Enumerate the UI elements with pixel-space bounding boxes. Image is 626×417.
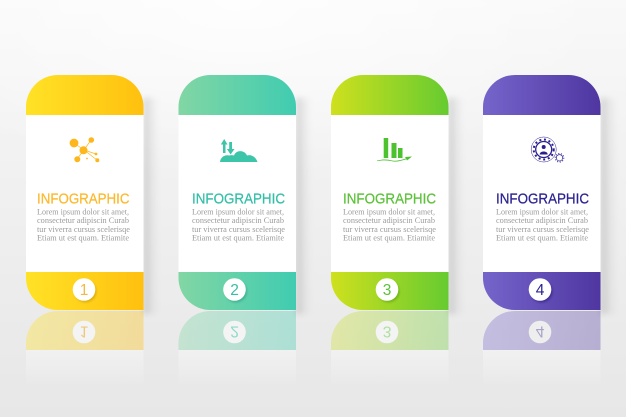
heading: INFOGRAPHIC bbox=[192, 191, 285, 207]
footer band bbox=[178, 272, 296, 310]
footer band bbox=[483, 272, 600, 310]
card shadow bbox=[448, 98, 464, 314]
card body bbox=[483, 115, 600, 272]
number badge: 2 bbox=[230, 282, 239, 299]
reflection bbox=[331, 311, 448, 386]
body text: Etiam ut est quam. Etiamite bbox=[343, 233, 435, 243]
icon: molecule network bbox=[70, 137, 99, 162]
body text: Lorem ipsum dolor sit amet, bbox=[192, 206, 284, 216]
footer band bbox=[331, 272, 448, 310]
body text: tur viverra cursus scelerisqe bbox=[343, 224, 436, 234]
body text: Etiam ut est quam. Etiamite bbox=[496, 233, 588, 243]
body text: Lorem ipsum dolor sit amet, bbox=[496, 206, 588, 216]
panel: step 1 bbox=[26, 75, 158, 386]
body text: tur viverra cursus scelerisqe bbox=[37, 224, 130, 234]
number badge: 3 bbox=[383, 282, 391, 299]
body text bbox=[192, 206, 285, 243]
body text: consectetur adipiscin Curab bbox=[192, 215, 284, 225]
body text: Etiam ut est quam. Etiamite bbox=[37, 233, 129, 243]
body text: consectetur adipiscin Curab bbox=[343, 215, 435, 225]
number badge bbox=[529, 278, 552, 302]
body text bbox=[343, 206, 436, 243]
number badge bbox=[376, 278, 400, 302]
reflection bbox=[178, 311, 296, 386]
panel: step 3 bbox=[331, 75, 464, 386]
body text: consectetur adipiscin Curab bbox=[496, 215, 588, 225]
reflection: 4 bbox=[536, 322, 545, 340]
reflection: 2 bbox=[230, 322, 239, 340]
body text bbox=[496, 206, 589, 243]
number badge: 1 bbox=[80, 282, 88, 299]
card shadow bbox=[144, 98, 158, 314]
panel: step 4 bbox=[483, 75, 618, 386]
body text: Lorem ipsum dolor sit amet, bbox=[343, 206, 435, 216]
reflection: 1 bbox=[80, 322, 88, 340]
card shadow bbox=[600, 98, 618, 314]
number badge: 4 bbox=[536, 282, 545, 299]
body text: Etiam ut est quam. Etiamite bbox=[192, 233, 284, 243]
heading: INFOGRAPHIC bbox=[37, 191, 130, 207]
body text: consectetur adipiscin Curab bbox=[37, 215, 129, 225]
header tab bbox=[483, 75, 600, 115]
header tab bbox=[178, 75, 296, 115]
body text: tur viverra cursus scelerisqe bbox=[496, 224, 589, 234]
header tab bbox=[26, 75, 144, 115]
footer band bbox=[26, 272, 144, 310]
reflection bbox=[26, 311, 144, 386]
card body bbox=[331, 115, 448, 272]
heading: INFOGRAPHIC bbox=[343, 191, 436, 207]
body text bbox=[37, 206, 130, 243]
icon: bar chart with arrow bbox=[377, 138, 412, 162]
body text: tur viverra cursus scelerisqe bbox=[192, 224, 285, 234]
card shadow bbox=[296, 98, 311, 314]
icon: cloud with arrows bbox=[220, 139, 258, 162]
header tab bbox=[331, 75, 448, 115]
reflection bbox=[483, 311, 600, 386]
card body bbox=[178, 115, 296, 272]
panel: step 2 bbox=[178, 75, 311, 386]
number badge bbox=[223, 278, 247, 302]
icon: gears with person bbox=[531, 137, 564, 162]
number badge bbox=[73, 278, 96, 302]
card body bbox=[26, 115, 144, 272]
body text: Lorem ipsum dolor sit amet, bbox=[37, 206, 129, 216]
heading: INFOGRAPHIC bbox=[496, 191, 589, 207]
reflection: 3 bbox=[383, 322, 391, 340]
